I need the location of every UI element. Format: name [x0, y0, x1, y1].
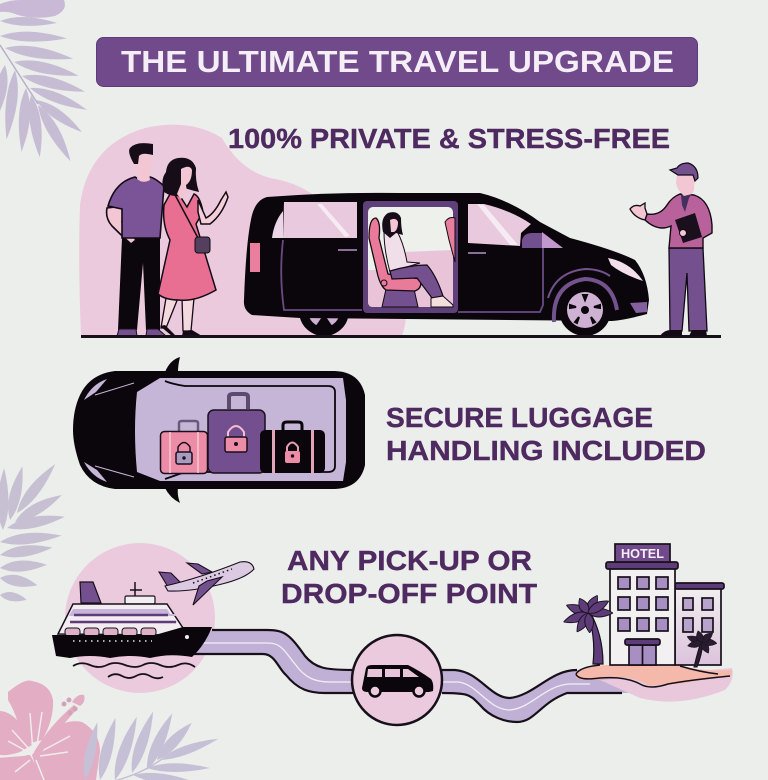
seats	[445, 218, 455, 262]
rear wheel	[299, 286, 349, 336]
hull	[52, 627, 212, 658]
side wing	[675, 583, 724, 665]
woman	[158, 158, 228, 336]
plane	[159, 562, 254, 605]
decor: top-left palm	[0, 0, 89, 164]
heading: any pick-up	[281, 545, 537, 609]
heading: secure luggage	[386, 402, 706, 466]
cabin interior	[135, 378, 346, 481]
tail light	[250, 243, 260, 272]
heading: private and stress-free: 100% PRIVATE & STRESS-FREE	[228, 123, 670, 154]
van body	[244, 193, 649, 321]
heading: any pick-up: DROP-OFF POINT	[281, 578, 537, 609]
passenger	[384, 230, 420, 272]
winding road	[190, 630, 630, 722]
decor: hibiscus flower	[0, 680, 100, 780]
van body	[73, 371, 365, 489]
pink circle behind ship	[65, 543, 215, 693]
van: top view with luggage	[73, 357, 365, 503]
heading: secure luggage: SECURE LUGGAGE	[386, 402, 653, 433]
cabin windows	[65, 628, 156, 636]
heading: secure luggage: HANDLING INCLUDED	[386, 435, 706, 466]
hotel sign: HOTEL	[621, 547, 664, 561]
decor: bottom palm	[80, 710, 220, 780]
palm: small	[686, 630, 717, 667]
pink suitcase	[160, 421, 208, 474]
front wheel	[548, 269, 617, 336]
van: side view	[244, 193, 649, 336]
decor: mid-left palm	[0, 460, 66, 604]
black suitcase	[260, 422, 325, 473]
pink background blob	[79, 125, 406, 336]
windscreen glints	[84, 379, 107, 482]
ship	[52, 582, 212, 678]
funnel	[80, 582, 101, 603]
windows	[272, 202, 563, 248]
waves	[73, 663, 195, 678]
door lines and handles	[281, 240, 543, 312]
lock	[176, 442, 192, 464]
purple suitcase	[208, 394, 265, 473]
ground line	[81, 335, 721, 338]
headlight and fog light	[608, 258, 647, 313]
main tower	[606, 562, 678, 665]
title banner: THE ULTIMATE TRAVEL UPGRADE	[121, 44, 674, 79]
mirror	[522, 233, 542, 248]
title banner	[96, 38, 698, 86]
mast and bridge	[130, 582, 142, 596]
door opening interior	[363, 201, 458, 313]
mirrors	[165, 357, 180, 503]
hotel	[606, 544, 724, 665]
lock	[225, 426, 247, 452]
couple	[107, 143, 228, 336]
man	[107, 143, 166, 336]
lock	[285, 442, 300, 463]
superstructure	[58, 604, 183, 635]
heading: any pick-up: ANY PICK-UP OR	[287, 545, 532, 576]
palm: large	[562, 593, 613, 664]
chauffeur	[630, 163, 712, 336]
van badge	[352, 635, 442, 725]
island	[576, 665, 733, 702]
